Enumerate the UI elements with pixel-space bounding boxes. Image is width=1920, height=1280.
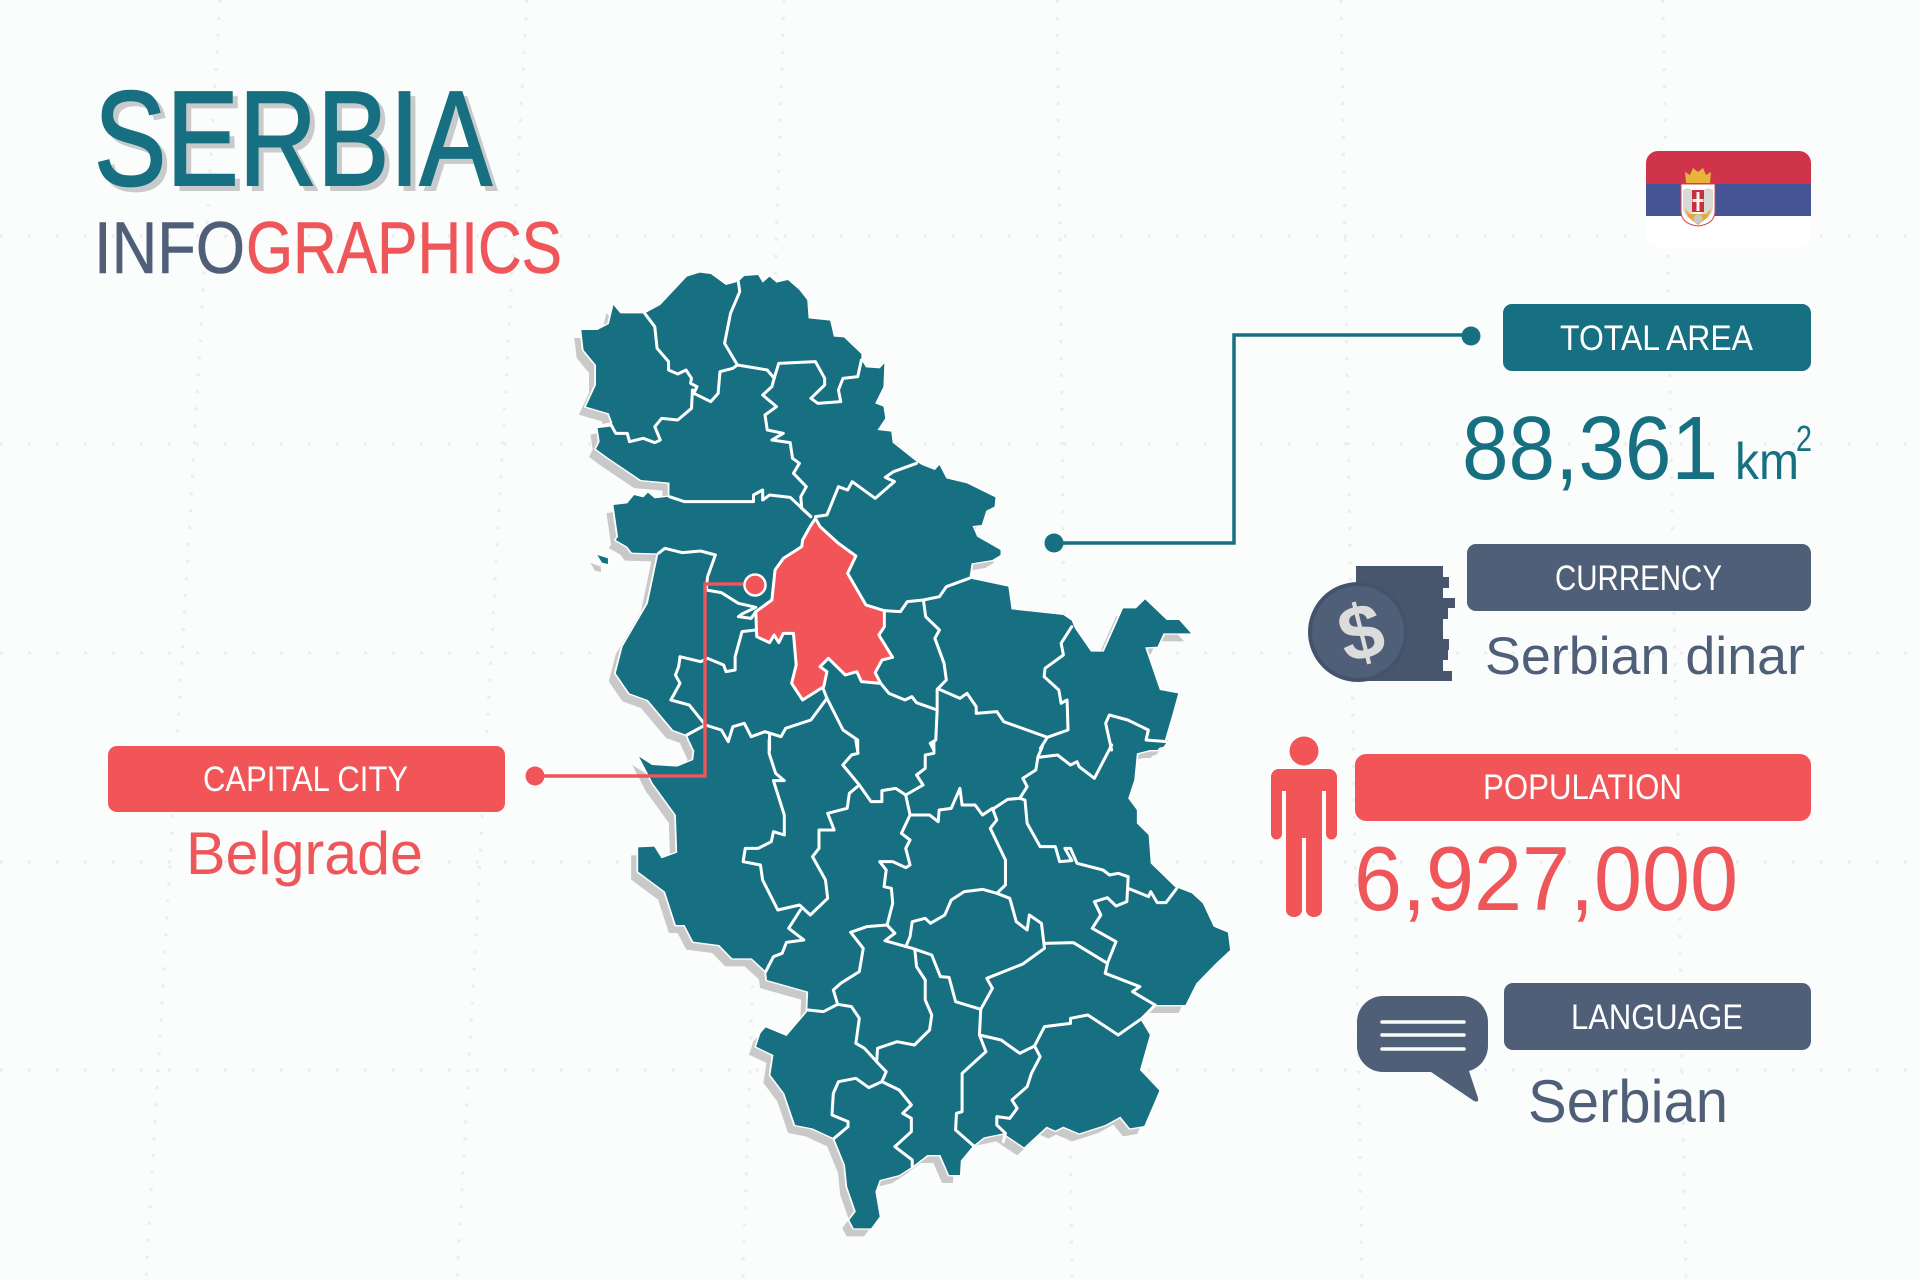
icon: coins: $: [1329, 584, 1393, 680]
icon: coat of arms: [1681, 168, 1715, 226]
connector: capital city: [526, 574, 766, 786]
label: currency: CURRENCY: [1555, 559, 1722, 598]
value: 88,361 km2: 88,361: [1462, 399, 1718, 499]
subtitle: INFOGRAPHICS: GRAPHICS: [246, 208, 562, 289]
label: total area: [1503, 304, 1811, 371]
connector: total area: [1044, 326, 1480, 552]
flag of Serbia: [1646, 151, 1811, 247]
label: population: [1355, 754, 1811, 821]
subtitle: INFOGRAPHICS: [94, 208, 562, 289]
map of Serbia: [574, 273, 1230, 1236]
label: language: LANGUAGE: [1571, 998, 1743, 1037]
label: currency: [1467, 544, 1811, 611]
label: population: POPULATION: [1483, 768, 1682, 807]
subtitle: INFOGRAPHICS: INFO: [94, 208, 245, 289]
value: 88,361 km2: km: [1735, 433, 1799, 491]
map shadow: [574, 281, 1223, 1236]
title: SERBIA: SERBIA: [94, 63, 492, 214]
coin stack: [1356, 566, 1455, 681]
label: capital city: [108, 746, 505, 812]
map landmass: [581, 273, 1230, 1228]
label: capital city: CAPITAL CITY: [203, 760, 408, 799]
value: Serbian: Serbian: [1528, 1068, 1728, 1135]
highlighted region: Belgrade: [756, 518, 893, 700]
regional borders south: [743, 740, 1177, 1167]
icon: person: [1271, 736, 1337, 917]
value: 6,927,000: 6,927,000: [1354, 829, 1738, 930]
value: Serbian dinar: Serbian dinar: [1485, 627, 1805, 686]
icon: speech bubble: [1357, 996, 1488, 1102]
value: 88,361 km2: 2: [1796, 418, 1812, 459]
icon: coins: [1308, 566, 1455, 682]
label: total area: TOTAL AREA: [1560, 319, 1754, 358]
value: Belgrade: Belgrade: [186, 820, 423, 887]
title: SERBIA: SERBIA: [99, 68, 497, 219]
label: language: [1504, 983, 1811, 1050]
regional borders north: [597, 282, 1167, 750]
